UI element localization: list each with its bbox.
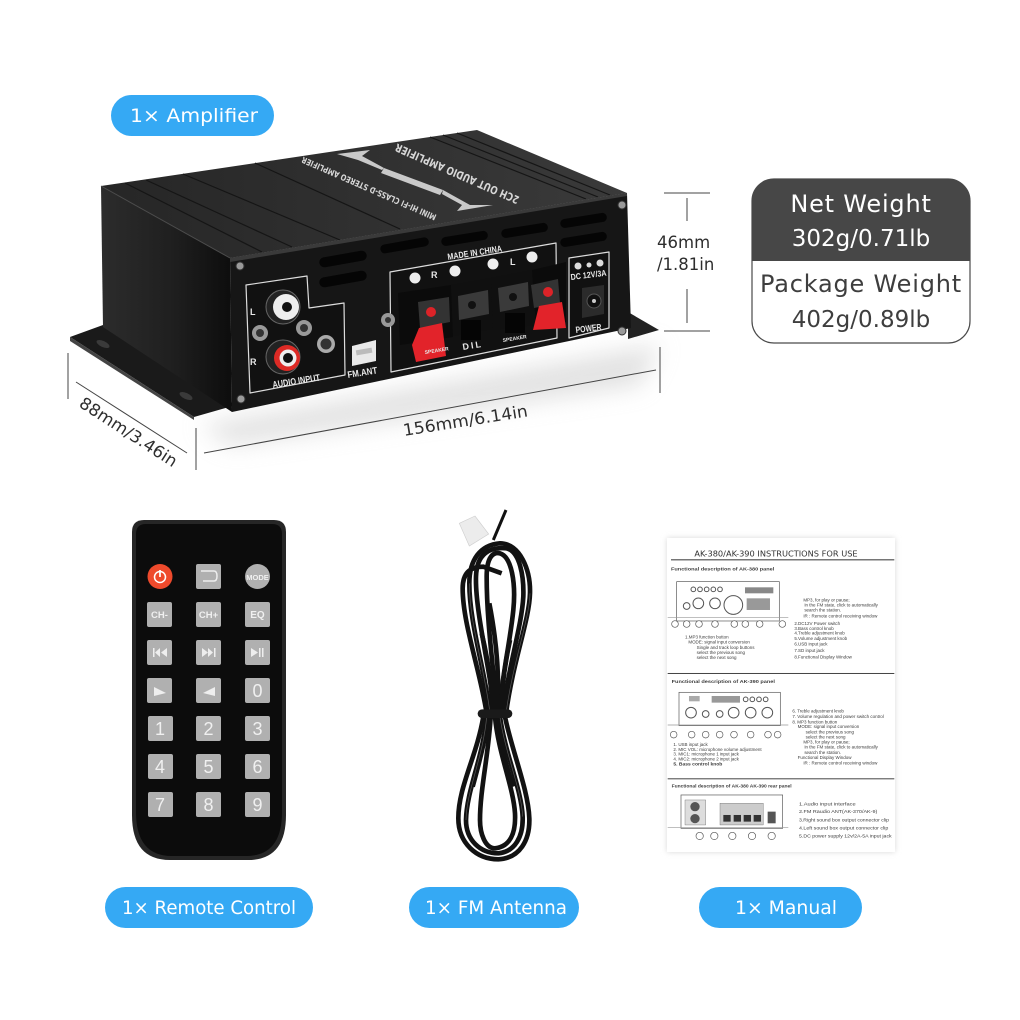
section: AK-390 panel: 2. MIC VOL: microphone volume adjustment [673, 747, 762, 752]
section: AK-390 panel: MP3, for play or pause; [803, 739, 850, 744]
weight box: Net Weight [790, 190, 932, 218]
section: rear panel: 1.Audio input interface [799, 801, 856, 807]
section: AK-390 panel: Functional description of AK-390 panel [672, 679, 776, 685]
audio input panel: AUDIO INPUT [272, 373, 321, 391]
section: rear panel: 5.DC power supply 12v/2A-5A input jack [799, 834, 892, 840]
section: AK-380 panel: 4.Treble adjustment knob [794, 630, 845, 635]
key grid: EQ [250, 610, 265, 621]
section: AK-390 panel: Functional Display Window [798, 755, 852, 760]
dimension: width: 156mm/6.14in [402, 401, 529, 440]
dimension: width [196, 347, 660, 470]
front panel [230, 193, 631, 412]
section: AK-380 panel: In the FM state, click to automatically [804, 603, 879, 608]
weight box: 302g/0.71lb [792, 226, 930, 252]
section: AK-380 panel: Single and track loop buttons [697, 645, 755, 650]
dimension: depth [68, 353, 187, 471]
label: 1x Manual [699, 887, 862, 928]
section: AK-390 panel: 3. MIC1: microphone 1 input jack [673, 752, 740, 757]
section: AK-380 panel: 5.Volume adjustment knob [794, 636, 848, 641]
product: amplifier [70, 130, 660, 445]
power panel: POWER [575, 322, 602, 335]
L RCA jack [266, 290, 300, 324]
manual title: AK-380/AK-390 INSTRUCTIONS FOR USE [694, 550, 858, 559]
section: AK-380 panel: MODE: signal input conversion [688, 639, 750, 644]
section: AK-380 panel: search the station. [804, 608, 841, 613]
key grid: CH- [151, 610, 168, 621]
section: rear panel: Functional description of AK-380 AK-390 rear panel [672, 783, 792, 789]
section: AK-390 panel: In the FM state, click to automatically [804, 744, 879, 749]
speaker terminal panel: DIL [462, 339, 484, 352]
section: AK-390 panel: 1. USB input jack [673, 742, 708, 747]
mounting flange left [70, 325, 236, 420]
weight box: 402g/0.89lb [792, 307, 930, 333]
section: AK-390 panel: select the next song [806, 734, 846, 739]
section: AK-390 panel: 6. Treble adjustment knob [792, 709, 844, 714]
label: 1x Remote Control [105, 887, 313, 928]
key grid: 0 [252, 681, 263, 701]
left side [101, 186, 232, 412]
label: 1x Amplifier: 1× Amplifier [130, 105, 258, 127]
top print text [300, 140, 521, 221]
section: AK-390 panel [668, 679, 884, 768]
section: AK-380 panel: select the next song [697, 655, 737, 660]
dimension: height: 46mm [657, 233, 710, 252]
mode button [245, 564, 270, 589]
center screw [381, 313, 395, 327]
audio input panel [246, 276, 345, 393]
weight box [752, 179, 970, 343]
audio input panel: L [250, 307, 256, 317]
speaker terminal panel: MADE IN CHINA [447, 243, 503, 262]
mode button: MODE [246, 573, 269, 582]
speaker terminal panel: L [510, 257, 516, 267]
key grid: 8 [203, 795, 214, 815]
section: AK-390 panel: 7. Volume regulation and power switch control [792, 714, 884, 719]
coiled wire [458, 543, 530, 859]
speaker terminal panel: SPEAKER [502, 334, 528, 344]
mounting flange right [628, 312, 659, 339]
shadow [200, 345, 660, 445]
product: FM antenna [458, 510, 530, 859]
section: AK-390 panel: search the station. [804, 750, 841, 755]
label: 1x Manual: 1× Manual [735, 897, 837, 919]
section: AK-390 panel: 8. MP3 function button [792, 719, 838, 724]
section: rear panel: 2.FM Raudio ANT(AK-370/AK-9) [799, 809, 878, 815]
section: rear panel: 3.Right sound box output connector clip [799, 817, 889, 823]
dimension: depth: 88mm/3.46in [76, 393, 181, 471]
label: 1x Remote Control: 1× Remote Control [122, 897, 296, 919]
section: AK-380 panel: Functional description of AK-380 panel [671, 566, 775, 572]
key grid: 7 [155, 795, 165, 815]
label: 1x FM Antenna [409, 887, 579, 928]
top panel [101, 130, 627, 258]
section: AK-390 panel: IR : Remote control receiving window [803, 760, 878, 765]
red clips [412, 323, 446, 362]
key grid: 4 [155, 757, 165, 777]
weight box: Package Weight [760, 270, 962, 298]
section: rear panel: 4.Left sound box output connector clip [799, 826, 889, 832]
section: AK-380 panel [668, 566, 879, 660]
section: AK-380 panel: 6.USB input jack [794, 642, 828, 647]
section: AK-380 panel: IR : Remote control receiving window [803, 613, 878, 618]
dimension: height [657, 193, 714, 331]
section: AK-380 panel: MP3, for play or pause; [803, 598, 850, 603]
section: AK-390 panel: select the previous song [806, 729, 855, 734]
section: AK-380 panel: 3.Bass control knob [794, 626, 834, 631]
black terminals [398, 285, 453, 345]
section: AK-390 panel: MODE: signal input conversion [798, 724, 860, 729]
key grid [147, 602, 270, 817]
power panel [569, 252, 609, 338]
power panel: DC 12V/3A [570, 268, 607, 282]
dimension: height: /1.81in [657, 255, 714, 274]
connector [459, 516, 489, 546]
power button [148, 564, 172, 589]
vents [318, 212, 607, 288]
section: AK-380 panel: 2.DC12V Power switch [794, 621, 841, 626]
label: 1x FM Antenna: 1× FM Antenna [425, 897, 567, 919]
speaker terminal panel: SPEAKER [424, 346, 450, 356]
speaker terminal panel [390, 243, 566, 372]
key grid: 5 [203, 757, 214, 777]
key grid: 3 [252, 719, 263, 739]
section: AK-380 panel: select the previous song [697, 650, 746, 655]
product: remote control [132, 520, 286, 860]
wire tie [478, 709, 512, 718]
section: AK-390 panel: 4. MIC2: microphone 2 input jack [673, 756, 740, 761]
top print text: 2CH OUT AUDIO AMPLIFIER [393, 140, 521, 206]
section: AK-380 panel: 7.SD input jack [794, 648, 825, 653]
audio input panel: R [250, 357, 257, 367]
key grid: 6 [252, 757, 263, 777]
key grid: 1 [155, 719, 165, 739]
section: AK-380 panel: 1.MP3 function button [685, 634, 729, 639]
section: rear panel [668, 783, 892, 840]
product: manual [667, 538, 895, 852]
top print text: MINI HI-FI CLASS-D STEREO AMPLIFIER [300, 154, 438, 221]
section: AK-390 panel: 5. Bass control knob [673, 762, 722, 768]
key grid: CH+ [199, 610, 219, 621]
FM antenna socket: FM.ANT [347, 365, 378, 381]
R RCA jack [266, 340, 300, 374]
speaker terminal panel: R [431, 270, 438, 280]
return button [196, 564, 221, 589]
label: 1x Amplifier [111, 95, 274, 136]
key grid: 9 [252, 795, 263, 815]
key grid: 2 [203, 719, 214, 739]
FM antenna socket [347, 340, 378, 381]
section: AK-380 panel: 8.Functional Display Window [794, 655, 853, 660]
corner screws [236, 201, 626, 403]
